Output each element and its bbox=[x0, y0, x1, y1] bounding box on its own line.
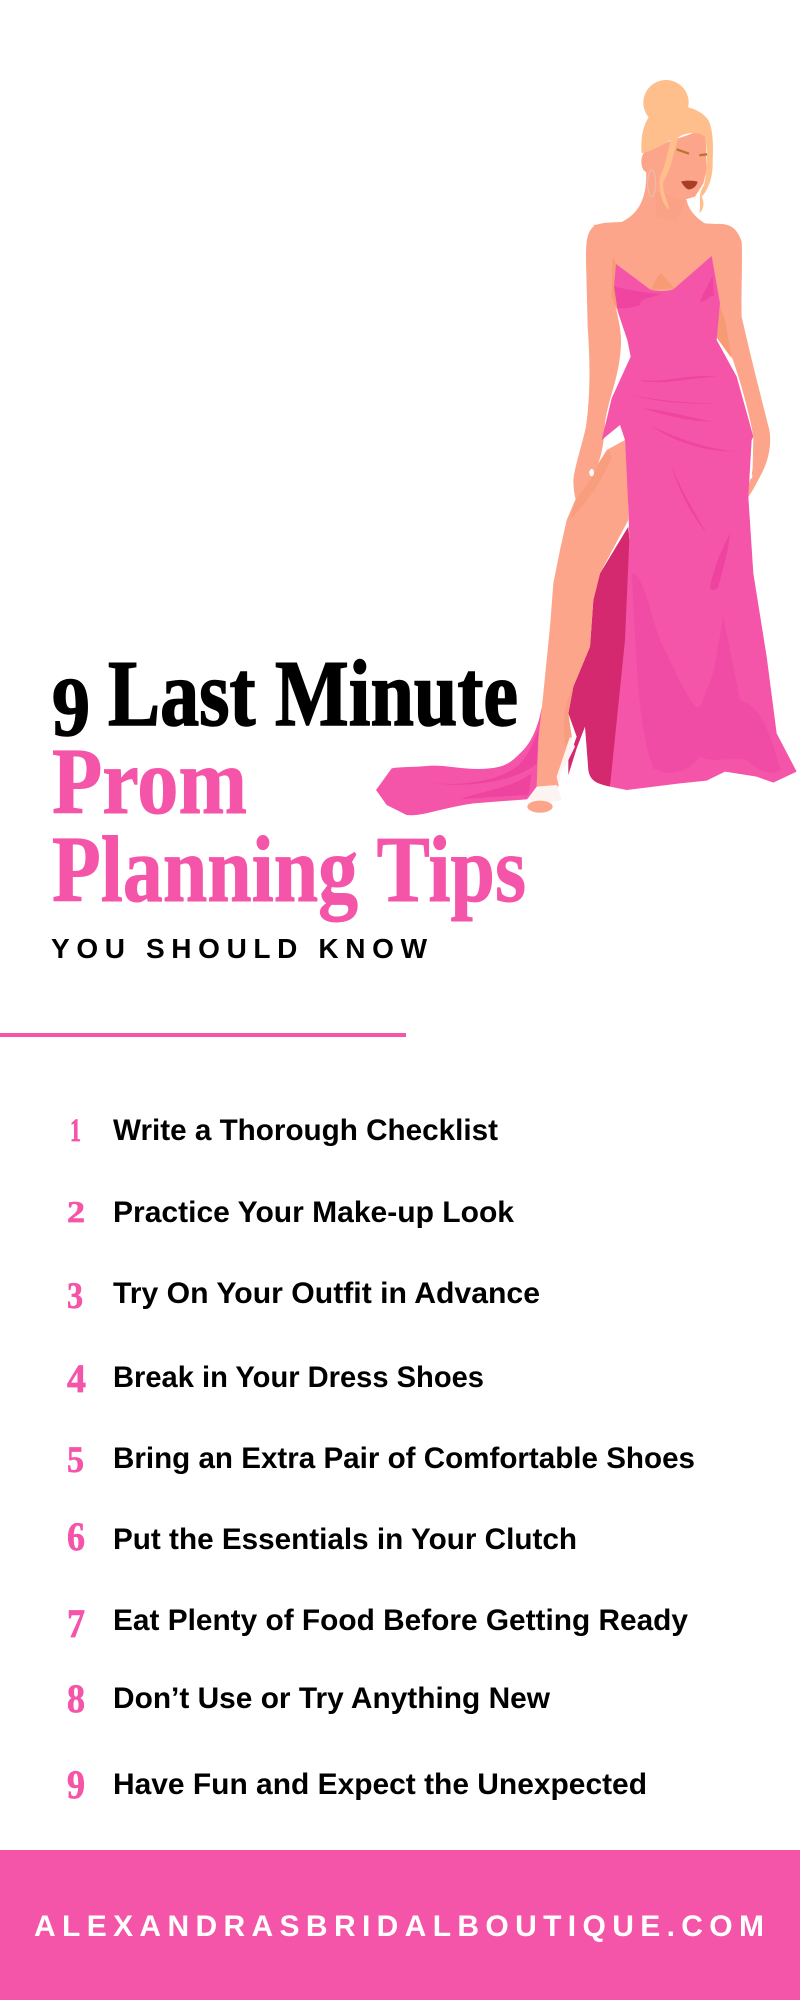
tip 9: Have Fun and Expect the Unexpected bbox=[113, 1768, 647, 1801]
eyebrows bbox=[677, 149, 707, 155]
tip 1: Write a Thorough Checklist bbox=[113, 1114, 498, 1147]
divider line bbox=[0, 1033, 406, 1037]
lips bbox=[681, 181, 698, 189]
title line 3: Planning Tips bbox=[52, 818, 526, 922]
earring bbox=[648, 170, 656, 197]
tip 9: 9 bbox=[67, 1762, 85, 1807]
title line 1: numeral: 9 bbox=[52, 661, 90, 754]
dress train bbox=[376, 707, 543, 815]
tip 7: 7 bbox=[67, 1601, 85, 1646]
bodice folds bbox=[614, 277, 737, 452]
fingernail bbox=[750, 473, 752, 479]
face bbox=[645, 132, 707, 200]
tip 6: 6 bbox=[67, 1514, 85, 1559]
tip 5: Bring an Extra Pair of Comfortable Shoes bbox=[113, 1442, 695, 1475]
tip 8 bbox=[67, 1676, 551, 1721]
leg bbox=[537, 440, 628, 787]
shoe bbox=[527, 737, 575, 802]
body shadows bbox=[612, 257, 732, 358]
subtitle: YOU SHOULD KNOW bbox=[51, 933, 428, 964]
inner dark skirt bbox=[568, 527, 637, 787]
toes bbox=[527, 801, 553, 813]
illustration: woman in pink prom dress bbox=[376, 80, 797, 815]
website url: ALEXANDRASBRIDALBOUTIQUE.COM bbox=[34, 1910, 764, 1943]
train folds bbox=[430, 730, 538, 799]
hand details bbox=[589, 469, 594, 476]
ear bbox=[641, 151, 653, 172]
lower skirt bbox=[589, 460, 781, 773]
dress body bbox=[602, 256, 797, 790]
tip 4 bbox=[67, 1356, 484, 1401]
title line 2: Prom bbox=[52, 730, 247, 834]
tip 3: Try On Your Outfit in Advance bbox=[113, 1277, 540, 1310]
tip 9 bbox=[67, 1762, 647, 1807]
tip 4: 4 bbox=[67, 1356, 86, 1401]
hair bbox=[641, 106, 713, 213]
tip 2: Practice Your Make-up Look bbox=[113, 1196, 514, 1229]
skirt drape folds bbox=[632, 573, 781, 773]
tip 5: 5 bbox=[67, 1440, 84, 1481]
tip 2: 2 bbox=[67, 1194, 85, 1229]
title line 1: words: Last Minute bbox=[108, 642, 518, 746]
torso and neck bbox=[593, 167, 720, 307]
tip 6: Put the Essentials in Your Clutch bbox=[113, 1523, 577, 1556]
leg shadow bbox=[564, 450, 612, 747]
tip 7: Eat Plenty of Food Before Getting Ready bbox=[113, 1604, 688, 1637]
tip 4: Break in Your Dress Shoes bbox=[113, 1361, 484, 1394]
tip 1: 1 bbox=[70, 1113, 81, 1149]
footer background bbox=[0, 1850, 800, 2000]
left arm bbox=[573, 222, 622, 500]
tip 8: 8 bbox=[67, 1676, 85, 1721]
skirt small folds bbox=[670, 460, 730, 590]
right arm bbox=[715, 224, 770, 498]
tip 7 bbox=[67, 1601, 688, 1646]
neck shadow bbox=[655, 192, 685, 222]
tip 3: 3 bbox=[67, 1276, 83, 1317]
hair bun bbox=[643, 80, 689, 125]
tip 6 bbox=[67, 1514, 577, 1559]
tip 8: Don’t Use or Try Anything New bbox=[113, 1682, 551, 1715]
tips list bbox=[67, 1113, 695, 1807]
title bbox=[52, 642, 526, 922]
footer band bbox=[0, 1850, 800, 2000]
